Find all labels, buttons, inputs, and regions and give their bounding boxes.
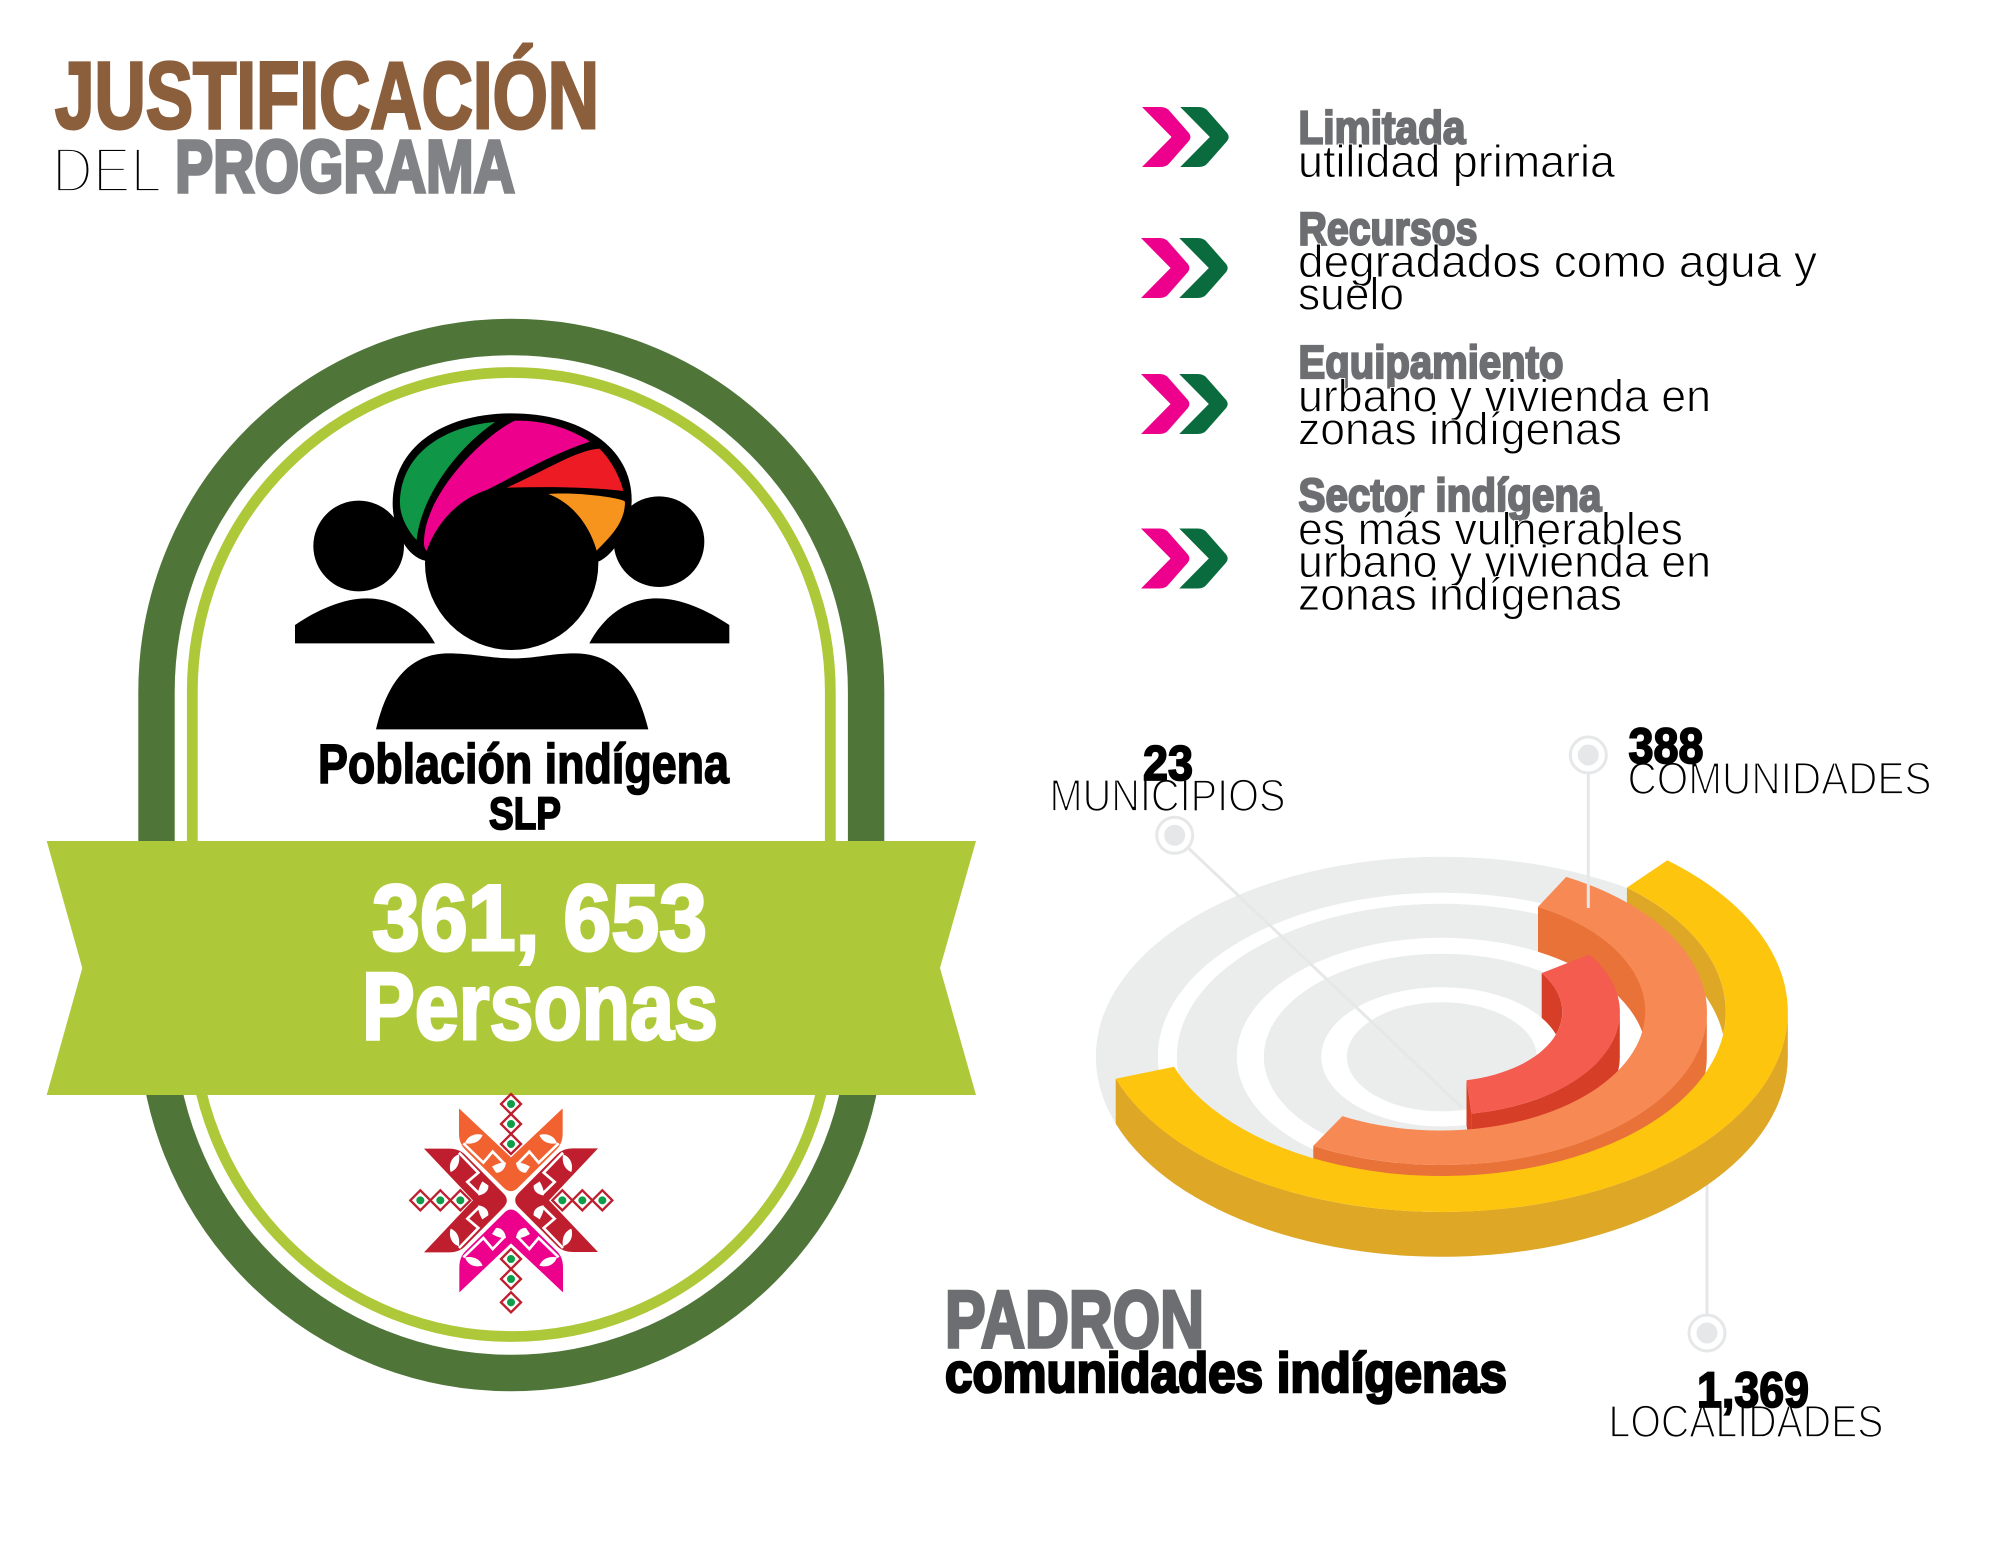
leader line: comunidades [1570, 737, 1606, 908]
yellow arc inner wall [1627, 888, 1726, 1034]
orange arc inner wall [1538, 907, 1647, 1034]
label: 388 comunidades: 388 [1628, 718, 1704, 774]
text: limitada [1298, 102, 1616, 187]
text: sector indígena [1298, 469, 1711, 620]
icon: double chevron 1 [1142, 107, 1229, 167]
text: sector indígena: Sector indígena [1298, 469, 1602, 521]
red arc: municipios [1466, 954, 1620, 1158]
label: 388 comunidades [1628, 718, 1932, 804]
title [52, 43, 599, 208]
title: JUSTIFICACIÓN [55, 43, 599, 149]
text: limitada: utilidad primaria [1298, 136, 1616, 187]
panel: population badge [47, 337, 976, 1373]
label: personas: Personas [362, 953, 718, 1060]
icon: double chevron 3 [1141, 374, 1228, 434]
label: 388 comunidades: COMUNIDADES [1628, 753, 1932, 804]
panel: justification list [1141, 102, 1818, 620]
title: DEL [52, 134, 162, 206]
yellow arc: localidades [1116, 860, 1788, 1257]
text: sector indígena: urbano y vivienda en [1298, 536, 1711, 587]
heading: padrón: comunidades indígenas [945, 1341, 1507, 1404]
label: 1,369 localidades: 1,369 [1697, 1362, 1809, 1418]
text: equipamiento: Equipamiento [1298, 336, 1564, 388]
figure: 361,653: 361, 653 [372, 865, 707, 970]
text: equipamiento: zonas indígenas [1298, 404, 1622, 454]
orange arc: comunidades [1313, 877, 1707, 1210]
chart base rings [1096, 857, 1788, 1257]
label: 1,369 localidades: LOCALIDADES [1608, 1396, 1884, 1447]
text: recursos [1298, 202, 1818, 320]
text: sector indígena: es más vulnerables [1298, 504, 1683, 554]
ribbon banner [47, 841, 976, 1095]
label: 1,369 localidades [1608, 1362, 1884, 1447]
icon: double chevron 2 [1141, 238, 1228, 298]
leader line: localidades [1689, 1170, 1725, 1351]
icon: double chevron 4 [1141, 528, 1228, 588]
icon: embroidered star ornament [410, 1094, 612, 1312]
text: sector indígena: zonas indígenas [1298, 569, 1622, 620]
text: equipamiento: urbano y vivienda en [1298, 370, 1711, 422]
heading: población indígena: Población indígena [318, 732, 730, 795]
label: 23 municipios [1050, 737, 1286, 821]
text: recursos: suelo [1298, 268, 1404, 320]
heading: padrón [945, 1275, 1507, 1404]
label: 23 municipios: 23 [1143, 737, 1193, 791]
chart: 3D concentric arcs [1096, 737, 1788, 1351]
icon: three people with turban [295, 413, 729, 729]
title: PROGRAMA [175, 125, 515, 208]
subheading: SLP: SLP [489, 788, 561, 839]
label: 23 municipios: MUNICIPIOS [1050, 770, 1286, 821]
text: recursos: degradados como agua y [1298, 236, 1818, 287]
heading: padrón: PADRON [945, 1275, 1204, 1365]
text: equipamiento [1298, 336, 1711, 454]
leader line: municipios [1157, 817, 1462, 1108]
text: recursos: Recursos [1298, 202, 1478, 254]
text: limitada: Limitada [1298, 102, 1466, 154]
